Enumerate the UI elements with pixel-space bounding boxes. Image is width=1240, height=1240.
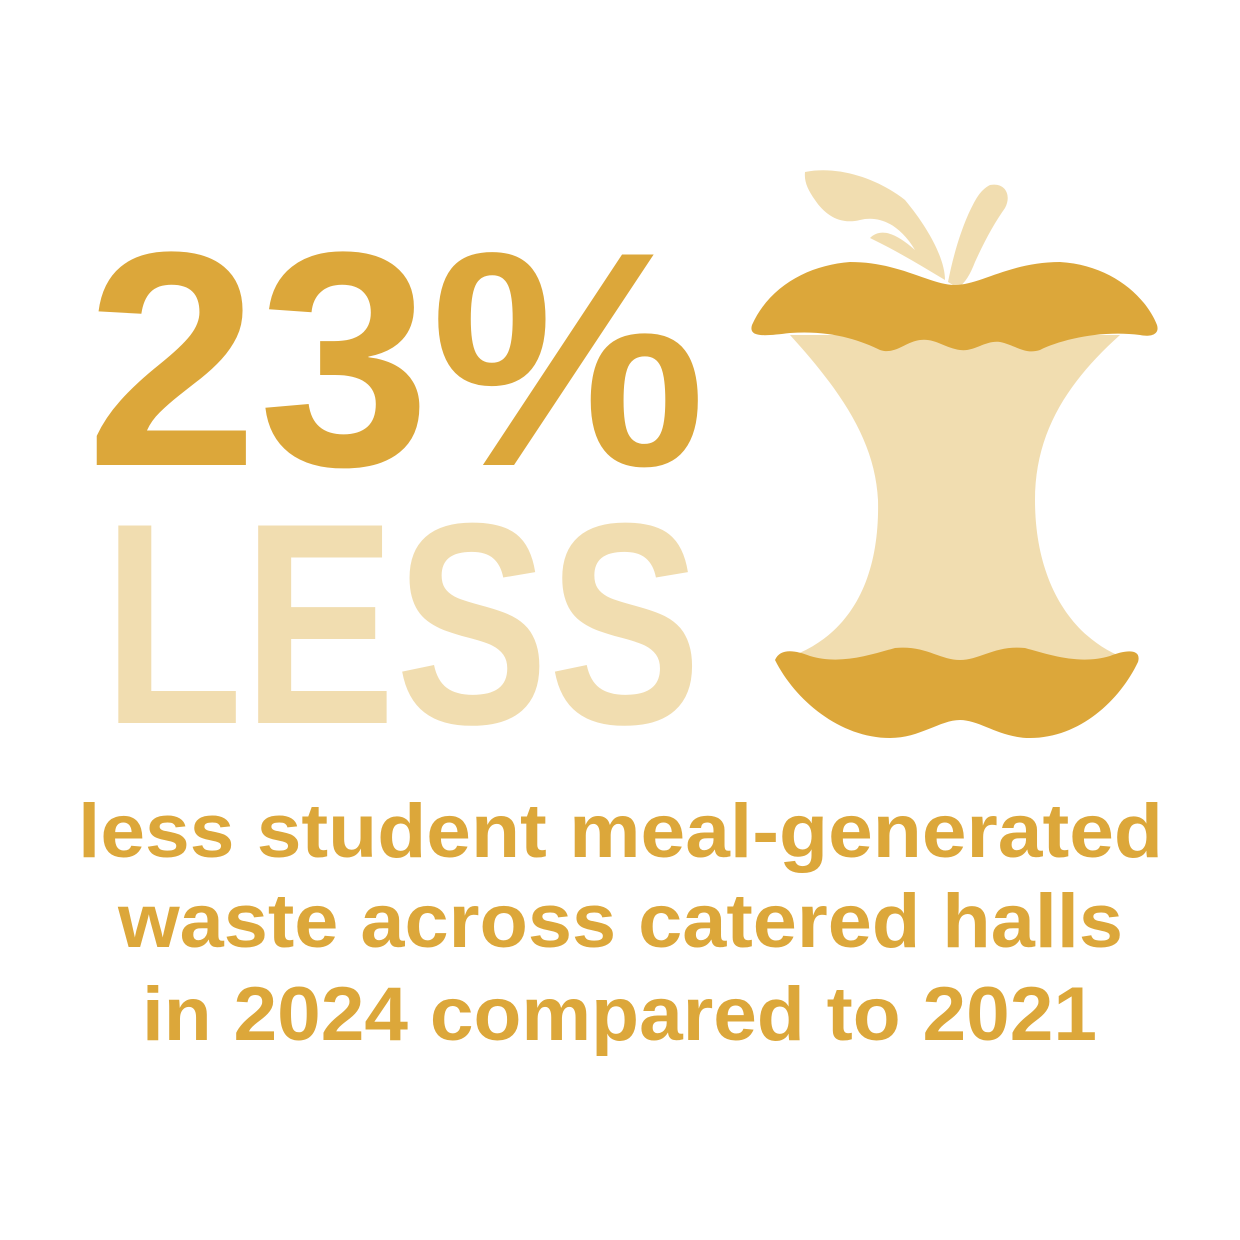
caption text: waste across catered halls (117, 879, 1123, 964)
headline: LESS: LESS (103, 463, 701, 784)
stem (948, 185, 1008, 288)
bottom skin (775, 648, 1139, 738)
top skin (751, 262, 1158, 351)
headline: 23%: 23% (86, 188, 706, 530)
caption text (78, 789, 1163, 1057)
caption text: less student meal-generated (78, 789, 1163, 874)
icon: apple core (751, 170, 1158, 738)
core flesh (780, 335, 1130, 660)
leaf (805, 170, 945, 280)
caption text: in 2024 compared to 2021 (142, 972, 1097, 1057)
